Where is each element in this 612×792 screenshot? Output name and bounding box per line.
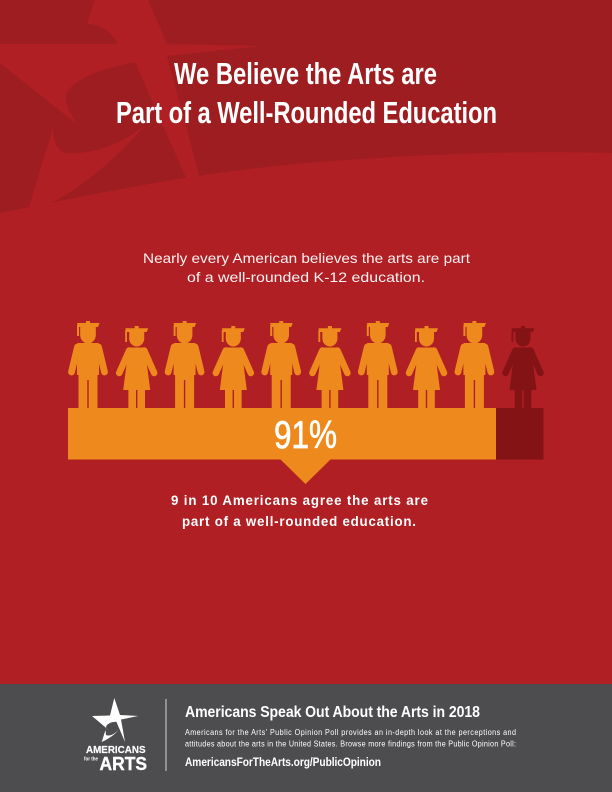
intro text: of a well-rounded K-12 education. xyxy=(187,269,425,285)
footer divider xyxy=(166,699,167,771)
logo: Americans for the Arts: for the xyxy=(84,756,98,762)
header dark band xyxy=(0,0,612,213)
progress bar 91%: 91% xyxy=(274,414,337,457)
decorative star watermark xyxy=(0,0,262,210)
logo: Americans for the Arts: AMERICANS xyxy=(86,745,146,756)
footer text: attitudes about the arts in the United States. Browse more findings from the Public Opinion Poll: xyxy=(185,739,516,749)
caption: 9 in 10 Americans agree the arts are xyxy=(171,493,428,508)
progress bar 91% xyxy=(68,408,544,484)
footer text: AmericansForTheArts.org/PublicOpinion xyxy=(185,756,381,769)
footer text: Americans Speak Out About the Arts in 2018 xyxy=(185,703,480,721)
logo: Americans for the Arts xyxy=(84,698,147,774)
caption xyxy=(171,493,428,529)
intro text xyxy=(143,250,470,285)
footer band xyxy=(0,684,612,792)
title: Part of a Well-Rounded Education xyxy=(116,95,497,130)
logo: Americans for the Arts: ARTS xyxy=(100,753,147,774)
footer text xyxy=(185,703,516,769)
title xyxy=(116,56,497,130)
caption: part of a well-rounded education. xyxy=(182,514,416,529)
intro text: Nearly every American believes the arts are part xyxy=(143,250,470,266)
pictogram: nine orange students, one dark student xyxy=(72,321,540,409)
title: We Believe the Arts are xyxy=(174,56,437,91)
footer text: Americans for the Arts' Public Opinion Poll provides an in-depth look at the perceptions and xyxy=(185,728,516,737)
